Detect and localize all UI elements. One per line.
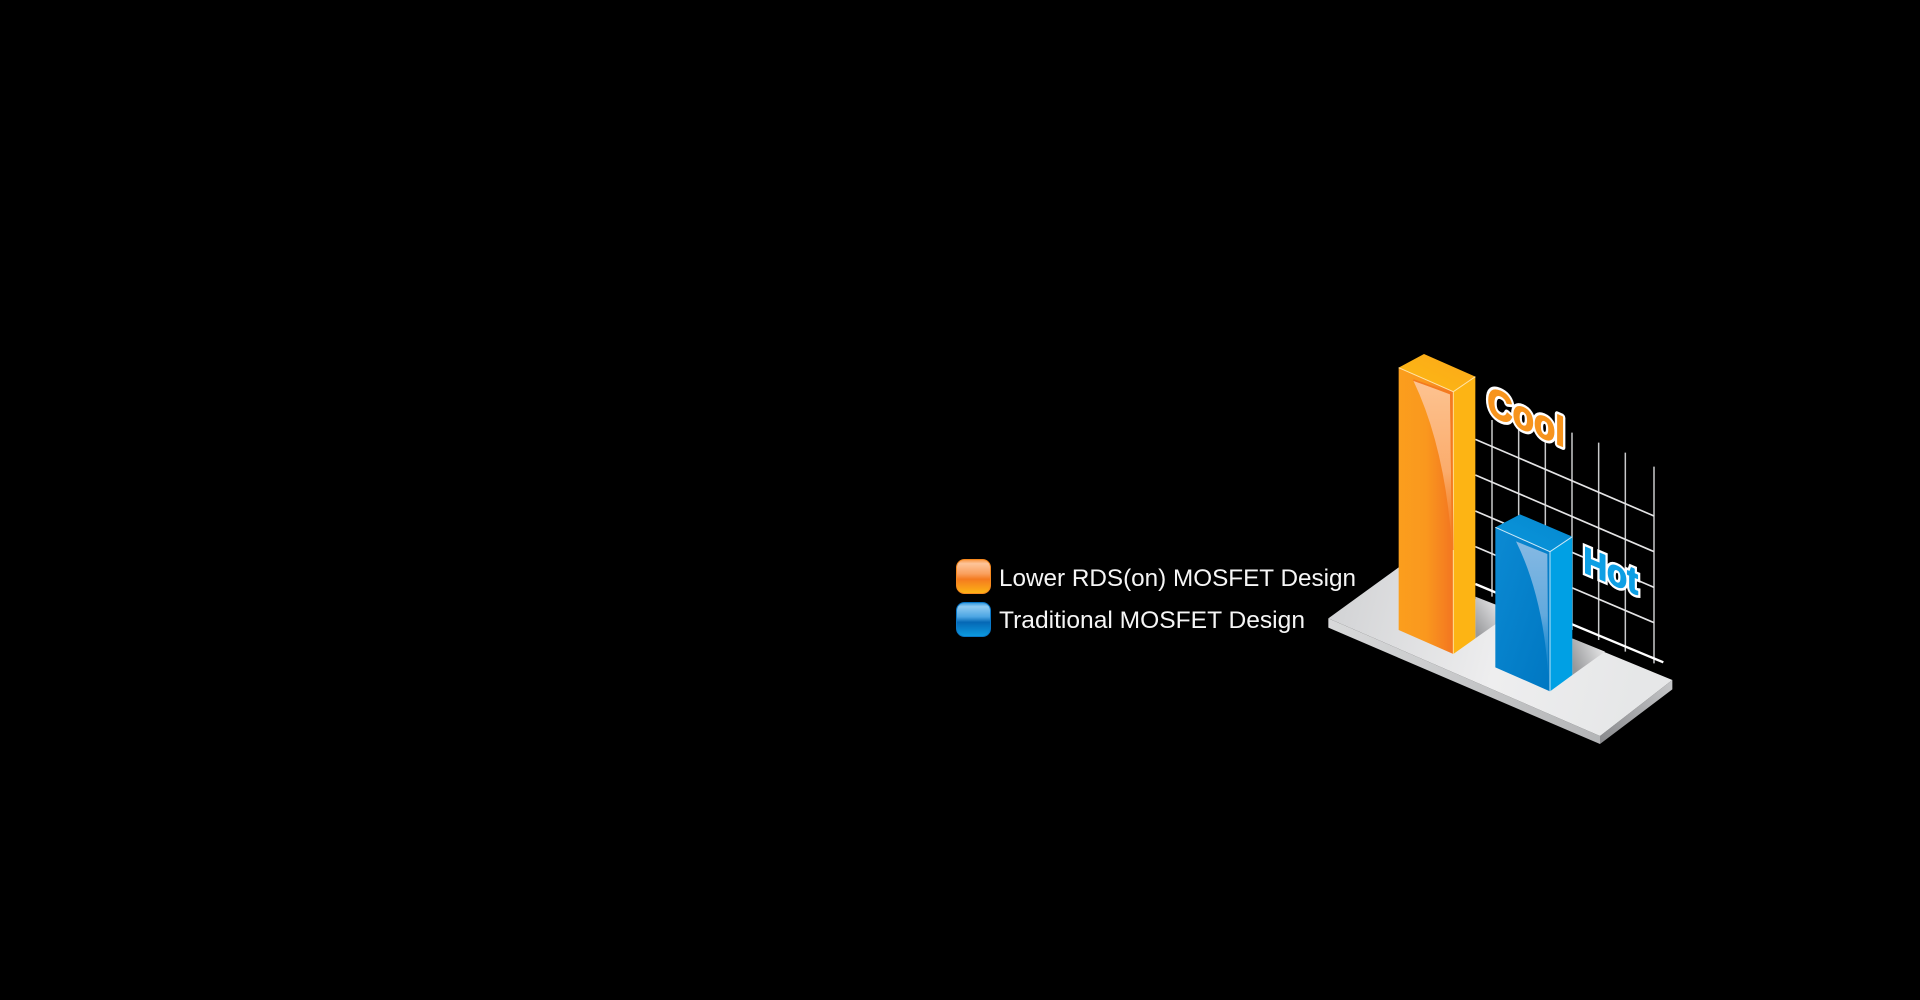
legend [956,560,1356,636]
legend swatch: blue [956,602,990,636]
bar chart [1328,354,1672,744]
orange bar [1399,354,1475,654]
blue bar [1495,514,1572,691]
platform [1328,567,1672,744]
chart grid [1475,420,1663,663]
label: Cool: Cool [1487,378,1565,457]
bar shadow: blue [1572,638,1605,675]
label: Hot: Hot [1583,538,1638,603]
label: Cool: Cool [1487,378,1565,457]
legend label: traditional: Traditional MOSFET Design [999,607,1305,634]
bar shadow: orange [1475,597,1497,638]
legend swatch: orange [956,560,990,594]
label: Hot: Hot [1583,538,1638,603]
legend label: lower RDS(on): Lower RDS(on) MOSFET Design [999,565,1356,592]
